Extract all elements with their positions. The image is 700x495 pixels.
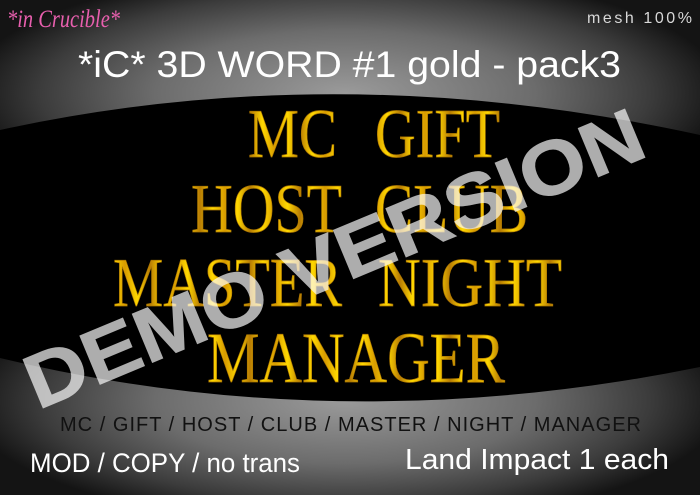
gold word: GIFT: GIFT [375, 96, 500, 173]
permissions: MOD / COPY / no trans [30, 448, 300, 478]
land impact: Land Impact 1 each [405, 444, 669, 476]
title: *iC* 3D WORD #1 gold - pack3 [78, 44, 621, 85]
gold word group [113, 96, 562, 398]
mesh label: mesh 100% [587, 10, 692, 27]
demo version watermark: DEMO VERSION [12, 92, 657, 426]
gold word: MANAGER: MANAGER [207, 318, 505, 398]
gold word: NIGHT: NIGHT [378, 245, 562, 322]
black ellipse panel [0, 94, 700, 401]
gold word: MC: MC [248, 96, 337, 173]
background bottom gradient [0, 248, 700, 495]
word list: MC / GIFT / HOST / CLUB / MASTER / NIGHT / MANAGER [60, 414, 641, 436]
gold word: CLUB: CLUB [375, 171, 528, 248]
gold word: MASTER: MASTER [113, 245, 342, 322]
background top gradient [0, 0, 700, 248]
gold word: HOST: HOST [191, 171, 342, 248]
brand logo: *in Crucible* [7, 6, 120, 33]
